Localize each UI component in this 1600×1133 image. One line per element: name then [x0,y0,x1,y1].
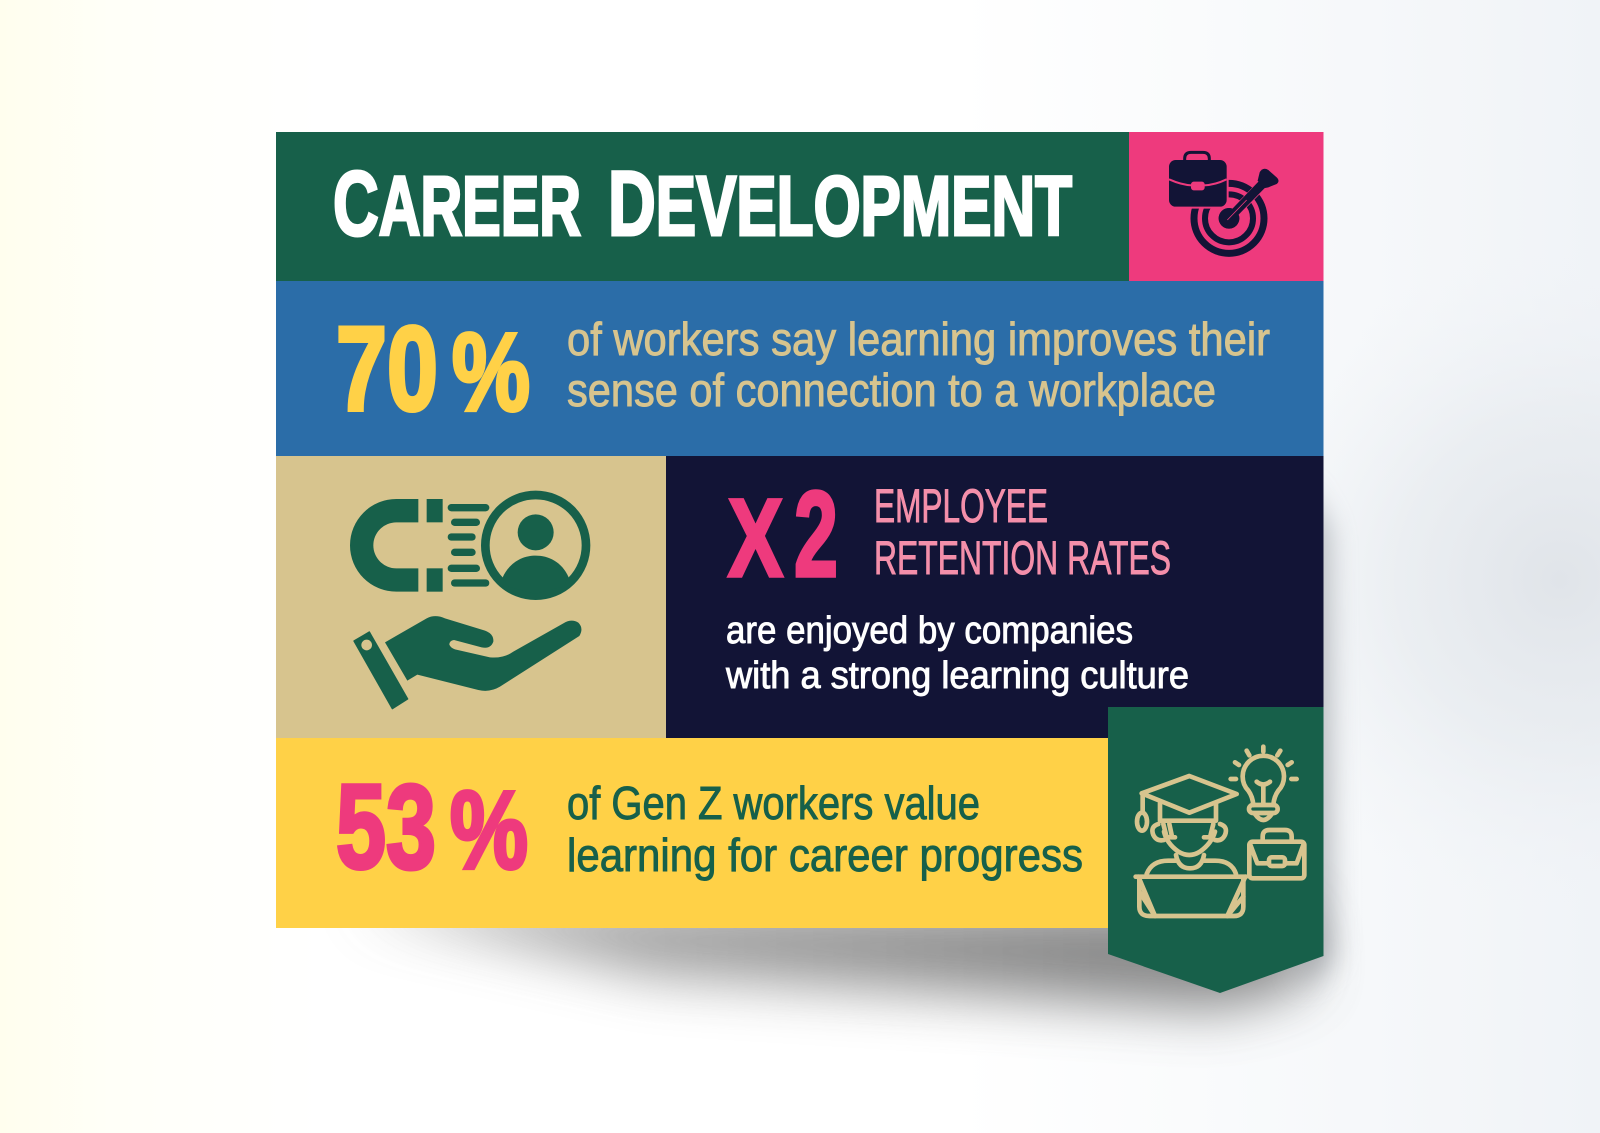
header panel [276,132,1129,282]
panel: 70% stat [276,281,1324,456]
icon: briefcase and target [1169,152,1278,253]
panel: icon briefcase and target [1129,132,1324,282]
70% description [567,313,1270,416]
stat x2: 2 [794,466,838,602]
53% description [567,777,1083,881]
stat x2: X [728,477,783,600]
title: DEVELOPMENT [608,153,1072,255]
panel: green banner [1108,707,1324,993]
title: CAREER [333,153,581,255]
53% description: learning for career progress [567,829,1083,881]
53% description: of Gen Z workers value [567,777,980,829]
panel: x2 retention [666,456,1324,738]
retention description: with a strong learning culture [725,655,1189,697]
retention heading: EMPLOYEE [874,479,1048,532]
stat x2 [728,466,838,602]
stat 70% [336,302,530,436]
70% description: of workers say learning improves their [567,313,1270,365]
icon: graduate with laptop, bulb and briefcase [1136,747,1304,916]
retention heading [874,479,1171,584]
70% description: sense of connection to a workplace [567,364,1216,416]
stat 53%: % [450,769,528,892]
stat 53% [336,760,528,894]
retention description [725,610,1189,697]
panel shadow [350,480,1332,1010]
icon: magnet attracting talent over hand [350,495,586,709]
stat 53%: 53 [336,760,436,894]
retention description: are enjoyed by companies [726,610,1133,652]
title [333,153,1072,255]
stat 70%: 70 [336,302,438,436]
panel: magnet and hand [276,456,666,738]
retention heading: RETENTION RATES [874,531,1171,584]
panel: 53% stat [276,738,1116,928]
stat 70%: % [452,311,530,434]
